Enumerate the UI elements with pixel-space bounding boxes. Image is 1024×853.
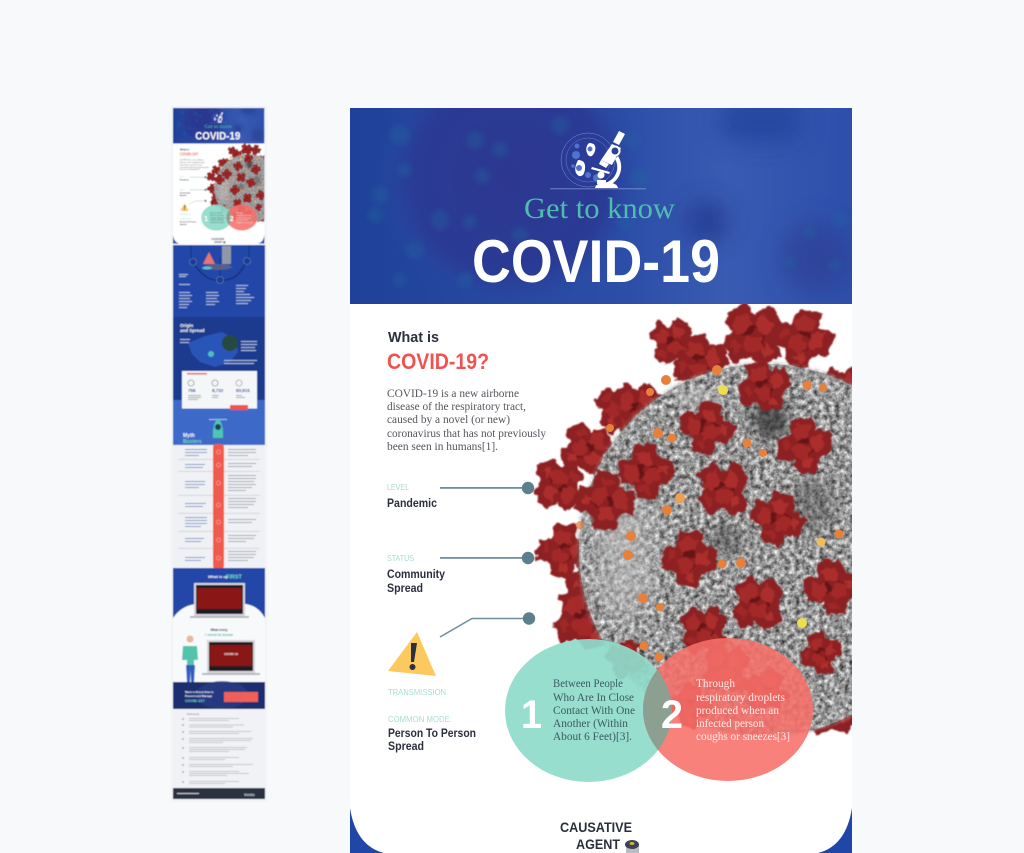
fact: status community spread with connector: Spread <box>387 581 423 595</box>
callout: transmission mode 2: infected person <box>696 718 764 730</box>
thumbnail: statistics card: 8,732 <box>212 388 224 393</box>
callout: transmission mode 1: Contact With One <box>553 705 635 717</box>
title: COVID-19: COVID-19 <box>472 228 720 295</box>
callout: transmission mode 2: produced when an <box>696 705 779 717</box>
thumbnail: prevention banner <box>173 681 265 710</box>
thumbnail: myth versus fact rows <box>173 444 265 569</box>
header banner <box>350 43 853 313</box>
thumbnail: statistics card <box>182 371 257 410</box>
callout: transmission mode 1 <box>505 639 672 782</box>
heading: causative agent <box>560 819 632 852</box>
heading: What is COVID-19? <box>387 329 489 374</box>
text block: COVID-19 description: caused by a novel (or new) <box>387 414 510 426</box>
thumbnail: what is up first section with laptop: FIRST <box>226 574 243 580</box>
callout: transmission mode 1: Another (Within <box>553 718 628 730</box>
callout: transmission mode 1: About 6 Feet)[3]. <box>553 731 632 743</box>
virus: spikes behind the sphere <box>526 296 873 740</box>
subtitle: Get to know: Get to know <box>524 192 675 225</box>
text block: COVID-19 description <box>387 388 546 453</box>
heading: causative agent: CAUSATIVE <box>560 819 632 835</box>
thumbnail: origin and spread section: Origin <box>180 323 194 328</box>
illustration: coronavirus particle <box>526 296 951 740</box>
virus: orange and yellow surface proteins <box>576 365 844 662</box>
callout: transmission mode 2: coughs or sneezes[3] <box>696 731 790 743</box>
thumbnail: origin and spread section: and Spread <box>180 328 205 333</box>
heading: What is COVID-19?: COVID-19? <box>387 349 489 374</box>
thumbnail: prevention banner: COVID-19? <box>185 699 206 703</box>
callout: transmission mode 1: Between People <box>553 678 623 690</box>
thumbnail: miniature copy of the top section <box>173 96 282 244</box>
callout: transmission mode 2: respiratory droplets <box>696 692 786 704</box>
text block: COVID-19 description: disease of the respiratory tract, <box>387 401 526 413</box>
panel: enlarged infographic top section <box>350 43 951 853</box>
fact: level pandemic with connector: Pandemic <box>387 496 437 510</box>
thumbnail: person and laptop: What every <box>210 628 228 632</box>
fact: level pandemic with connector: LEVEL <box>387 482 409 492</box>
virus: textured grey sphere <box>579 364 951 736</box>
thumbnail: blue causative agent section <box>173 237 265 318</box>
thumbnail: origin and spread section <box>173 317 265 401</box>
fact: transmission common mode: TRANSMISSION <box>388 687 446 697</box>
thumbnail: myth and facts rocket band: Busters <box>183 439 202 445</box>
text block: COVID-19 description: coronavirus that has not previously <box>387 428 546 440</box>
text block: COVID-19 description: COVID-19 is a new airborne <box>387 388 519 400</box>
fact: level pandemic with connector <box>387 482 534 510</box>
fact: transmission common mode: COMMON MODE: <box>388 714 452 724</box>
connector: transmission <box>440 612 535 637</box>
thumbnail: prevention banner: Prevent and Manage <box>185 694 213 698</box>
fact: status community spread with connector: STATUS <box>387 553 414 563</box>
thumbnail: what is up first section with laptop <box>173 568 265 683</box>
thumbnail: statistics card: 83,915 <box>236 388 250 393</box>
thumbnail: myth and facts rocket band: Myth <box>183 433 195 439</box>
fact: transmission common mode <box>388 687 476 753</box>
callout: transmission mode 1: 1 <box>521 693 542 737</box>
thumbnail: references <box>173 709 265 789</box>
thumbnail: what is up first section with laptop: What is up <box>208 574 229 579</box>
thumbnail: references: References <box>187 713 200 716</box>
heading: What is COVID-19?: What is <box>388 329 439 346</box>
fact: status community spread with connector <box>387 552 534 595</box>
thumbnail: blue causative agent section: CAUSATIVE <box>210 237 228 241</box>
virus: spikes on the sphere <box>566 351 871 735</box>
thumbnail: footer bar <box>173 788 265 799</box>
callout: transmission mode 2 <box>505 638 813 782</box>
text block: COVID-19 description: been seen in humans[1]. <box>387 441 498 453</box>
panel: thumbnail of full infographic <box>172 107 266 800</box>
thumbnail: person and laptop: COVID-19 <box>224 652 238 656</box>
thumbnail: statistics card: 756 <box>188 388 196 393</box>
callout: transmission mode 2: 2 <box>661 693 683 737</box>
fact: status community spread with connector: Community <box>387 567 445 581</box>
callout: transmission mode 2: Through <box>696 678 735 690</box>
panel corners: blue section behind white rounded bottom <box>350 808 852 853</box>
heading: causative agent: AGENT <box>576 836 620 852</box>
thumbnail: footer bar: Vertic <box>244 792 256 797</box>
callout: transmission mode 1: Who Are In Close <box>553 692 634 704</box>
thumbnail: person and laptop: I need to know <box>205 632 234 637</box>
fact: transmission common mode: Spread <box>388 739 424 753</box>
thumbnail: prevention banner: Want to Know How to <box>185 690 214 694</box>
thumbnail: person and laptop <box>182 628 260 682</box>
thumbnail: myth and facts rocket band <box>173 400 265 445</box>
icon: microscope with cells <box>550 131 646 189</box>
icon: warning triangle <box>388 632 436 676</box>
icon: microscope eyepiece <box>625 840 639 853</box>
fact: transmission common mode: Person To Person <box>388 726 476 740</box>
